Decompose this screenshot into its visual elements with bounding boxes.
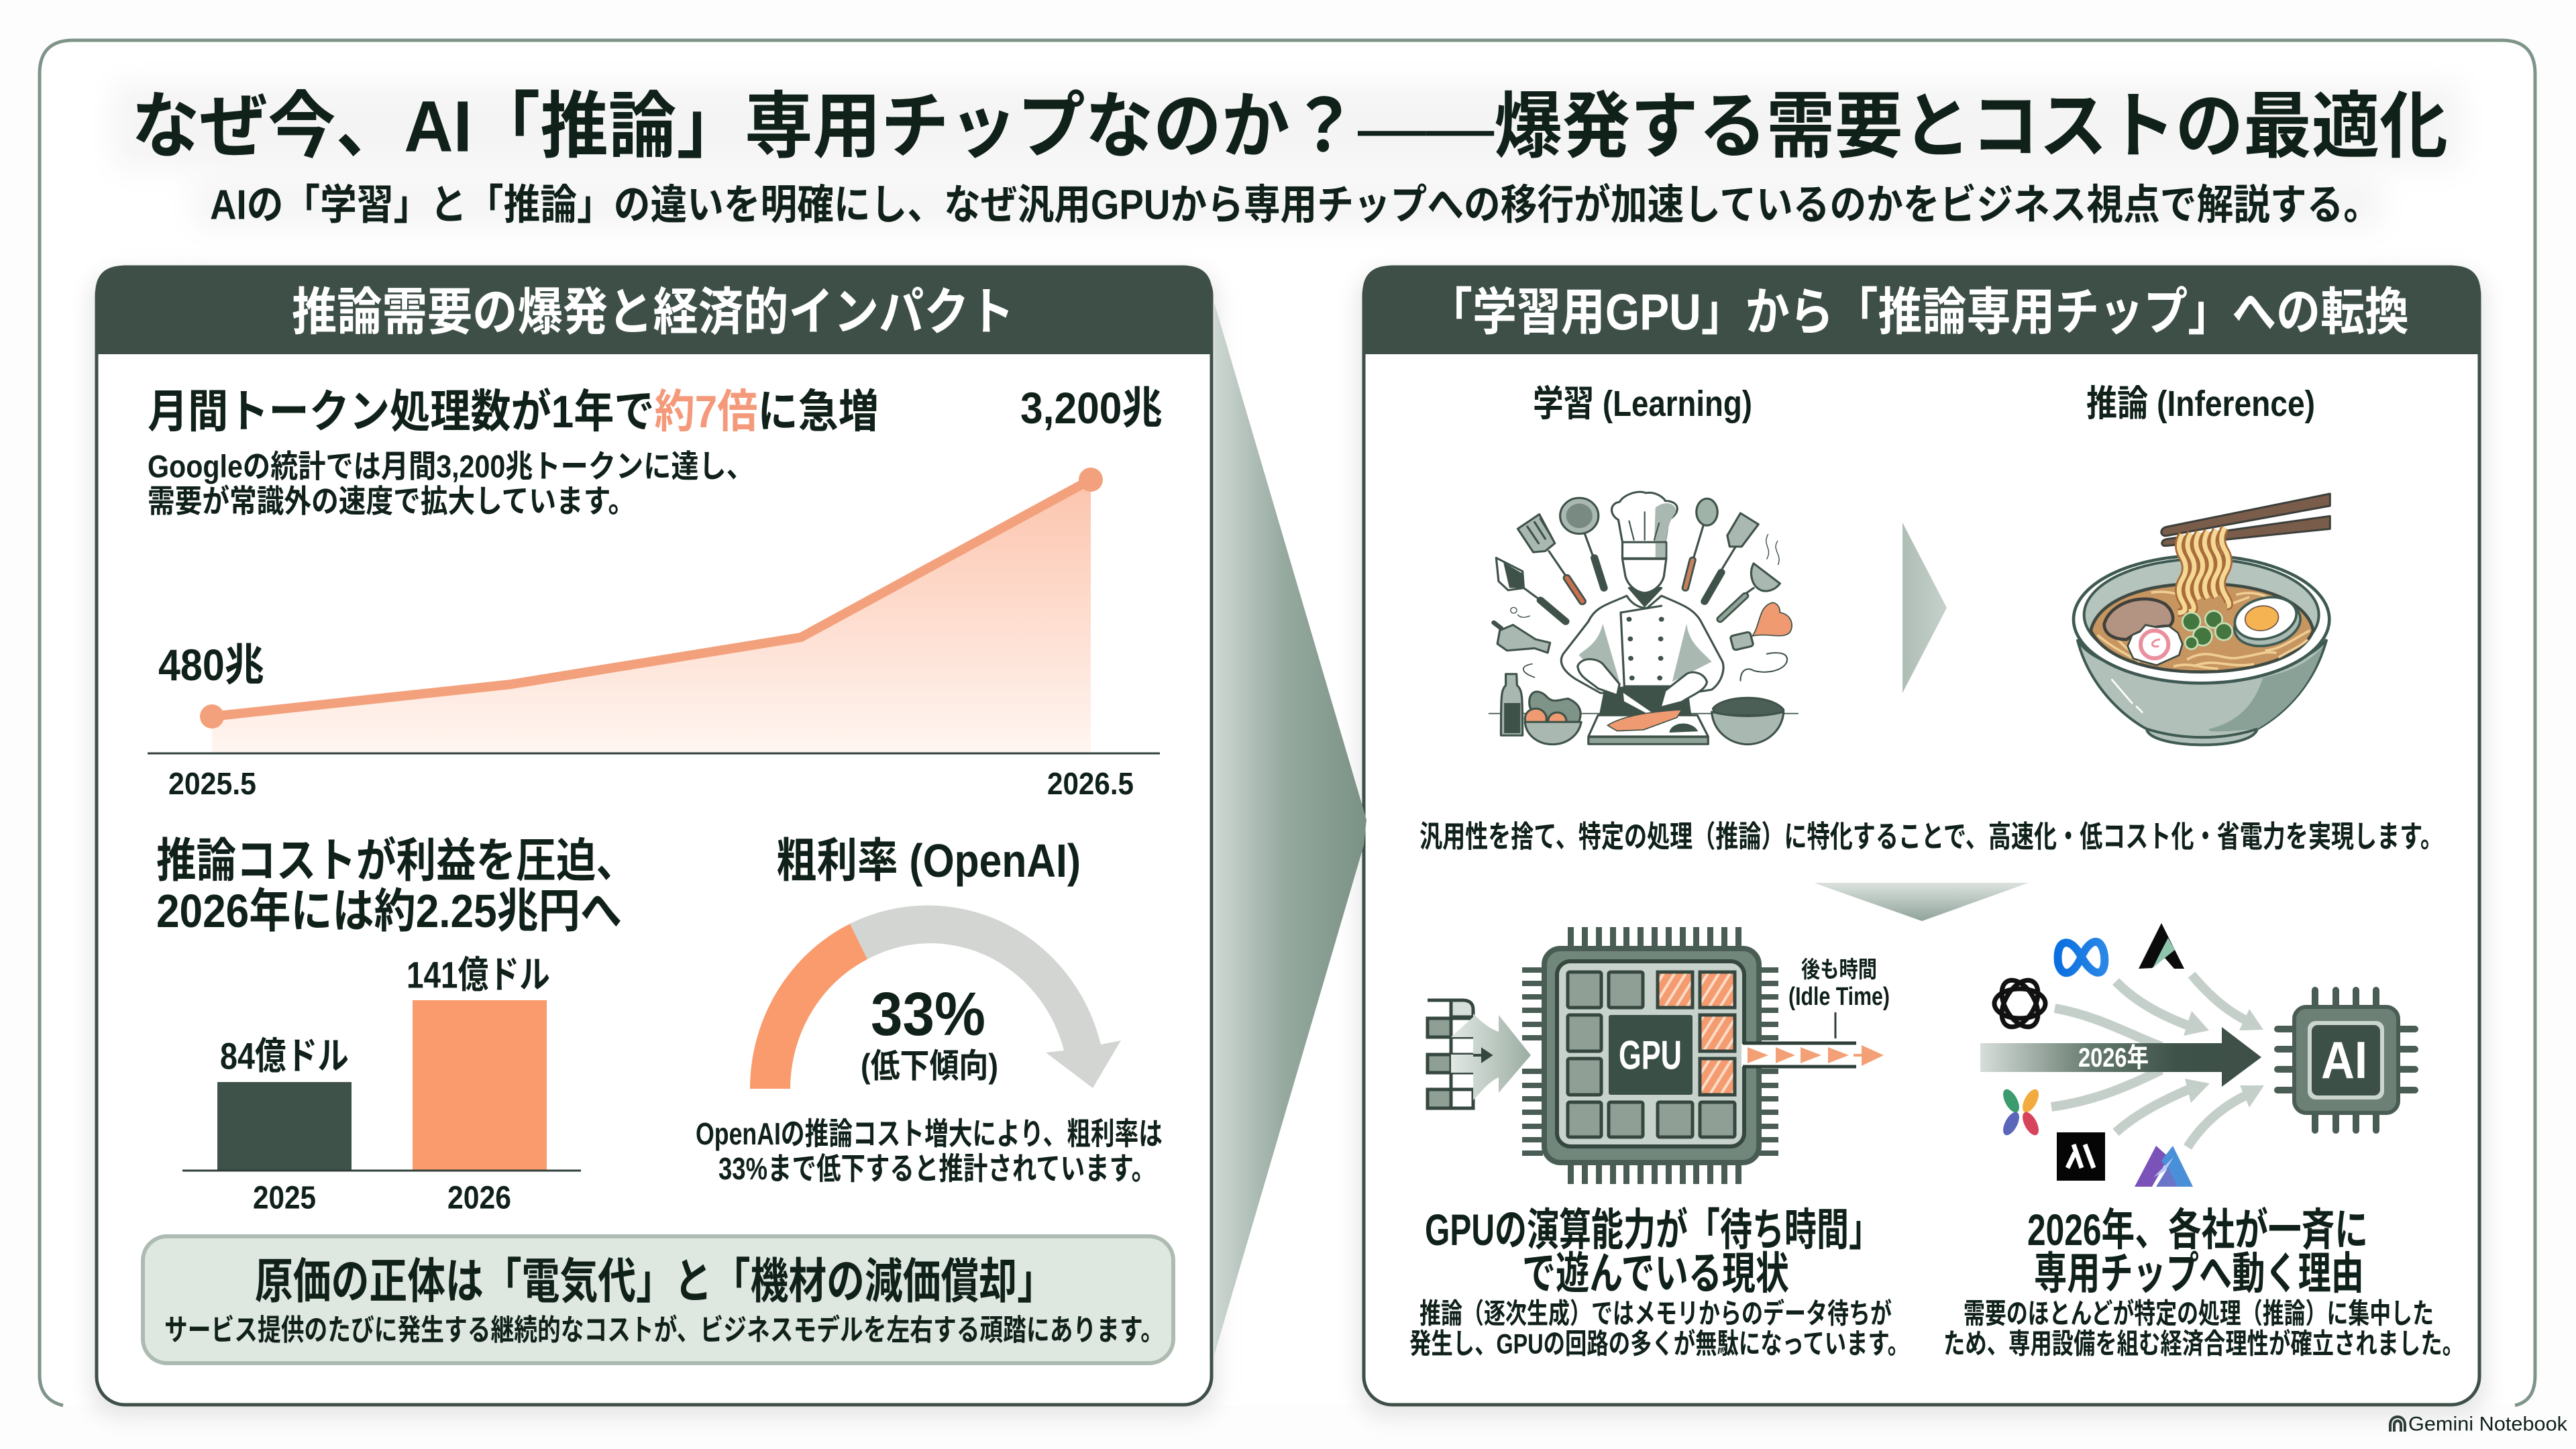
cost heading: 2026年には約2.25兆円へ [156,885,622,937]
memory cells [1568,972,1735,1137]
logo: knot [1994,974,2045,1033]
arrow: down [1814,883,2029,921]
chef face [1622,559,1666,593]
value label 480: 480兆 [158,640,264,690]
learning label: 学習 (Learning) [1533,384,1752,424]
bowl body [2078,639,2326,745]
axis label start: 2025.5 [168,766,256,801]
arrow: data into GPU [1451,1014,1531,1100]
inference label: 推論 (Inference) [2086,384,2315,424]
icon: chef with many tools [1489,492,1798,745]
panel: right, chip transition [1362,266,2481,1405]
gauge heading: 粗利率 (OpenAI) [776,835,1081,887]
panel: left, inference demand [95,266,1212,1405]
credit: Gemini Notebook: Gemini Notebook [2408,1413,2568,1436]
GPU heading: GPUの演算能力が「待ち時間」 [1425,1205,1881,1254]
arrow: big transition wedge [1214,303,1366,1355]
idle channel [1741,1043,1884,1067]
green onion [2182,611,2233,649]
token heading: 月間トークン処理数が1年で約7倍に急増 [148,386,879,437]
pork slice [2104,599,2173,639]
GPU description: 発生し、GPUの回路の多くが無駄になっています。 [1409,1328,1909,1359]
bottle [1501,674,1523,735]
logo: triangle mark [2139,923,2184,969]
small data arrow [1473,1050,1491,1061]
panel body [1364,267,2479,1405]
companies description [1943,1297,2464,1359]
GPU heading: で遊んでいる現状 [1522,1248,1789,1298]
soup [2091,584,2313,672]
diagram: GPU idle time [1428,927,1890,1184]
logo: Meta [2058,942,2104,973]
GPU description: 推論（逐次生成）ではメモリからのデータ待ちが [1419,1297,1892,1330]
data queue [1428,1000,1473,1108]
logo: black square [2057,1132,2105,1181]
chip body [1544,949,1759,1163]
axis label end: 2026.5 [1047,766,1134,801]
line chart [148,383,1163,801]
panel shadows [91,272,2486,1417]
panel header [95,266,1212,354]
bar chart: 2025 [253,1181,316,1216]
chef hat [1612,492,1677,542]
chef coat [1561,596,1723,693]
callout: 原価の正体は「電気代」と「機材の減価償却」 [255,1255,1055,1309]
idle label: (Idle Time) [1788,983,1890,1011]
gauge: gross margin: (低下傾向) [861,1047,998,1085]
icon: ramen bowl [2074,494,2330,745]
panel header [1362,266,2481,354]
companies description: 需要のほとんどが特定の処理（推論）に集中した [1964,1297,2434,1330]
curved arrows [2051,975,2264,1147]
gauge description [696,1116,1163,1186]
logo: purple mountain [2135,1146,2193,1187]
gauge description: OpenAIの推論コスト増大により、粗利率は [696,1116,1163,1151]
bar chart: 84億ドル [220,1034,349,1077]
diagram: companies converge [1980,923,2415,1187]
big arrow 2026 [1980,1027,2261,1087]
bar chart: 141億ドル [407,954,550,996]
companies heading [2027,1205,2368,1298]
icon: AI chip [2277,990,2415,1130]
bar chart: 2026 [447,1181,511,1216]
icon: AI chip: AI [2321,1030,2367,1089]
token description [148,448,754,519]
cost heading [156,835,636,937]
title halo [114,84,2462,227]
callout: サービス提供のたびに発生する継続的なコストが、ビジネスモデルを左右する頑踏にあります。 [164,1313,1164,1347]
diagram: companies converge: 2026年 [2078,1043,2149,1073]
gauge: gross margin: 33% [871,980,985,1049]
salad bowl [1713,698,1784,715]
GPU core [1609,1015,1693,1095]
panel heading: 「学習用GPU」から「推論専用チップ」への転換 [1428,284,2409,341]
GPU description [1409,1297,1909,1359]
arrow: learning to inference [1902,523,1947,693]
idle label: 後も時間 [1801,957,1877,983]
companies heading: 専用チップへ動く理由 [2034,1248,2364,1298]
narutomaki [2128,625,2182,665]
idle label [1788,957,1890,1038]
title: なぜ今、AI「推論」専用チップなのか？――爆発する需要とコストの最適化 [131,86,2448,166]
vegetable bowl [1529,692,1580,722]
GPU heading [1425,1205,1881,1298]
diagram: GPU idle time: GPU [1619,1033,1682,1077]
chef hands [1578,659,1619,695]
panel body [97,267,1212,1405]
egg [2230,595,2305,653]
bowl rim [2074,555,2329,683]
chef apron [1601,688,1690,714]
value label 3200: 3,200兆 [1020,383,1163,433]
cost heading: 推論コストが利益を圧迫、 [156,835,636,887]
noodles [2178,528,2229,612]
token description: 需要が常識外の速度で拡大しています。 [148,483,635,519]
gauge description: 33%まで低下すると推計されています。 [718,1151,1156,1186]
logo: petals [2000,1087,2042,1138]
gauge: gross margin [750,906,1121,1089]
panel heading: 推論需要の爆発と経済的インパクト [292,284,1014,341]
chopsticks [2161,494,2330,546]
token description: Googleの統計では月間3,200兆トークンに達し、 [148,448,754,484]
bar chart [182,954,581,1216]
cutting board [1589,715,1708,737]
pins [1522,927,1778,1184]
knife [1622,691,1662,718]
callout [143,1236,1173,1363]
companies heading: 2026年、各社が一斉に [2027,1205,2368,1254]
chef neck [1629,588,1662,606]
